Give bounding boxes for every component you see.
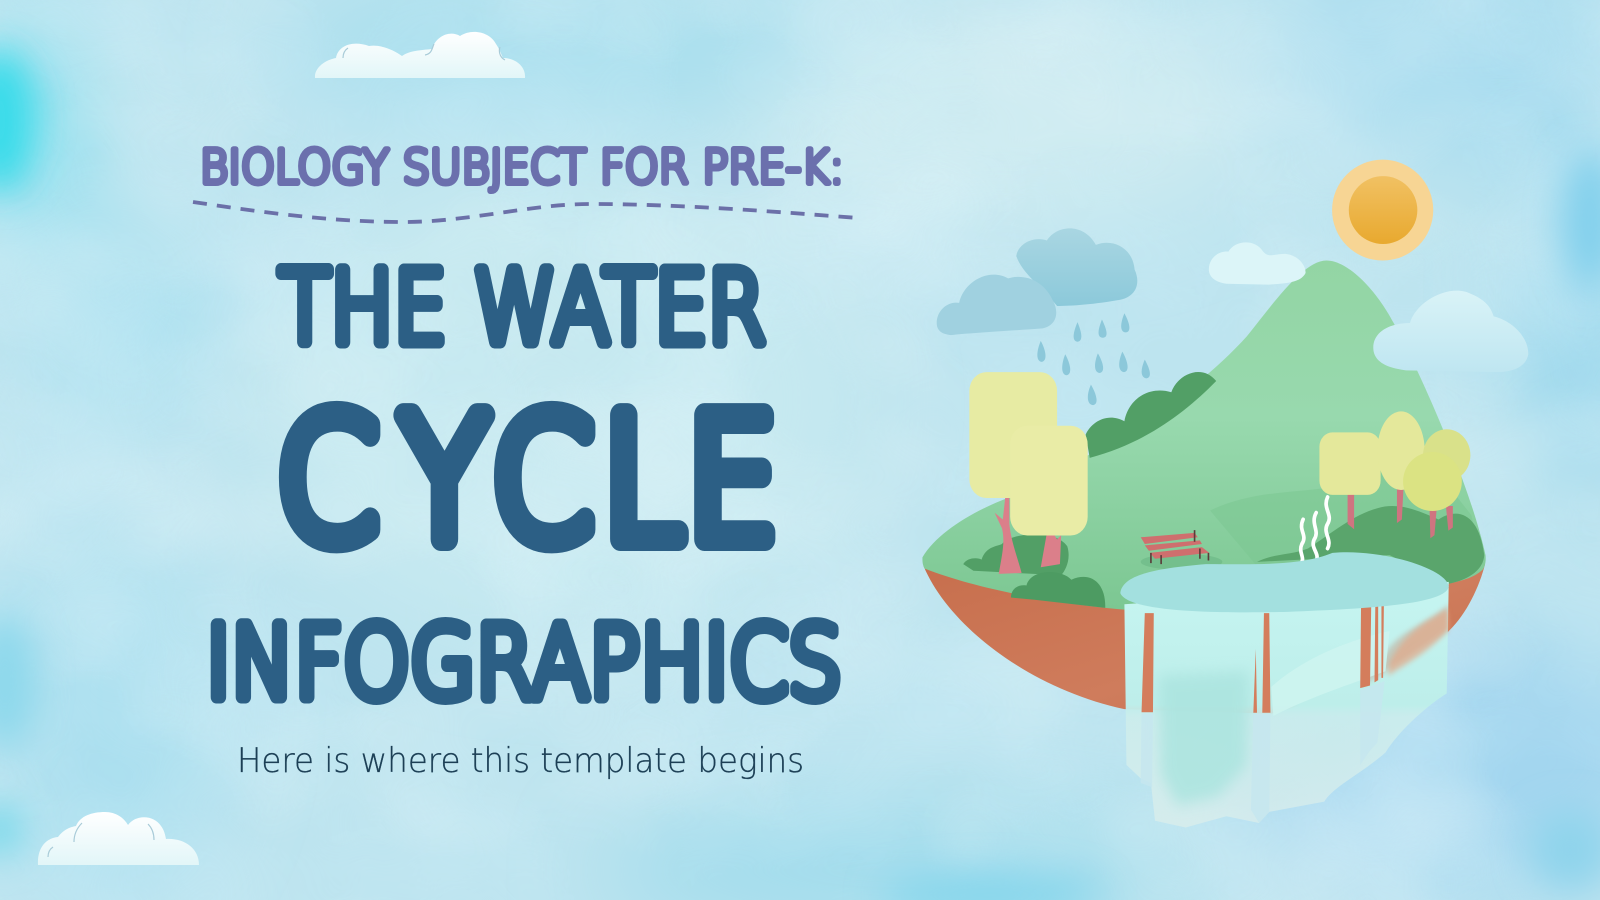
icon: sun <box>1332 160 1433 261</box>
island soil <box>924 542 1485 714</box>
title line: The Water: THE WATER <box>279 251 766 366</box>
cloud: light near peak <box>1209 242 1306 285</box>
waterfall <box>1124 582 1449 827</box>
cloud: right large <box>1373 291 1528 372</box>
island grass and mountain <box>922 261 1486 610</box>
trees left <box>969 372 1088 574</box>
steam wisps <box>1301 497 1329 564</box>
illustration: floating island water cycle <box>922 160 1528 827</box>
bushes left side <box>963 534 1105 608</box>
subtitle heading: Biology subject for Pre-K: BIOLOGY SUBJECT FOR PRE-K: <box>200 140 844 194</box>
rain drops <box>1037 313 1150 405</box>
rain clouds <box>937 228 1137 335</box>
cloud: bottom left white <box>38 812 199 865</box>
tagline text: Here is where this template begins <box>237 741 804 781</box>
bench <box>1141 530 1222 570</box>
bushes right side <box>1257 506 1484 584</box>
title line: Cycle: CYCLE <box>277 383 778 580</box>
trees right <box>1319 411 1470 538</box>
mountain shading <box>1210 452 1483 569</box>
cloud: top white <box>315 32 525 78</box>
title line: Infographics: INFOGRAPHICS <box>206 606 842 721</box>
dashed wavy divider <box>193 202 858 222</box>
lake <box>1120 552 1449 612</box>
bush on hillside <box>1086 372 1216 458</box>
